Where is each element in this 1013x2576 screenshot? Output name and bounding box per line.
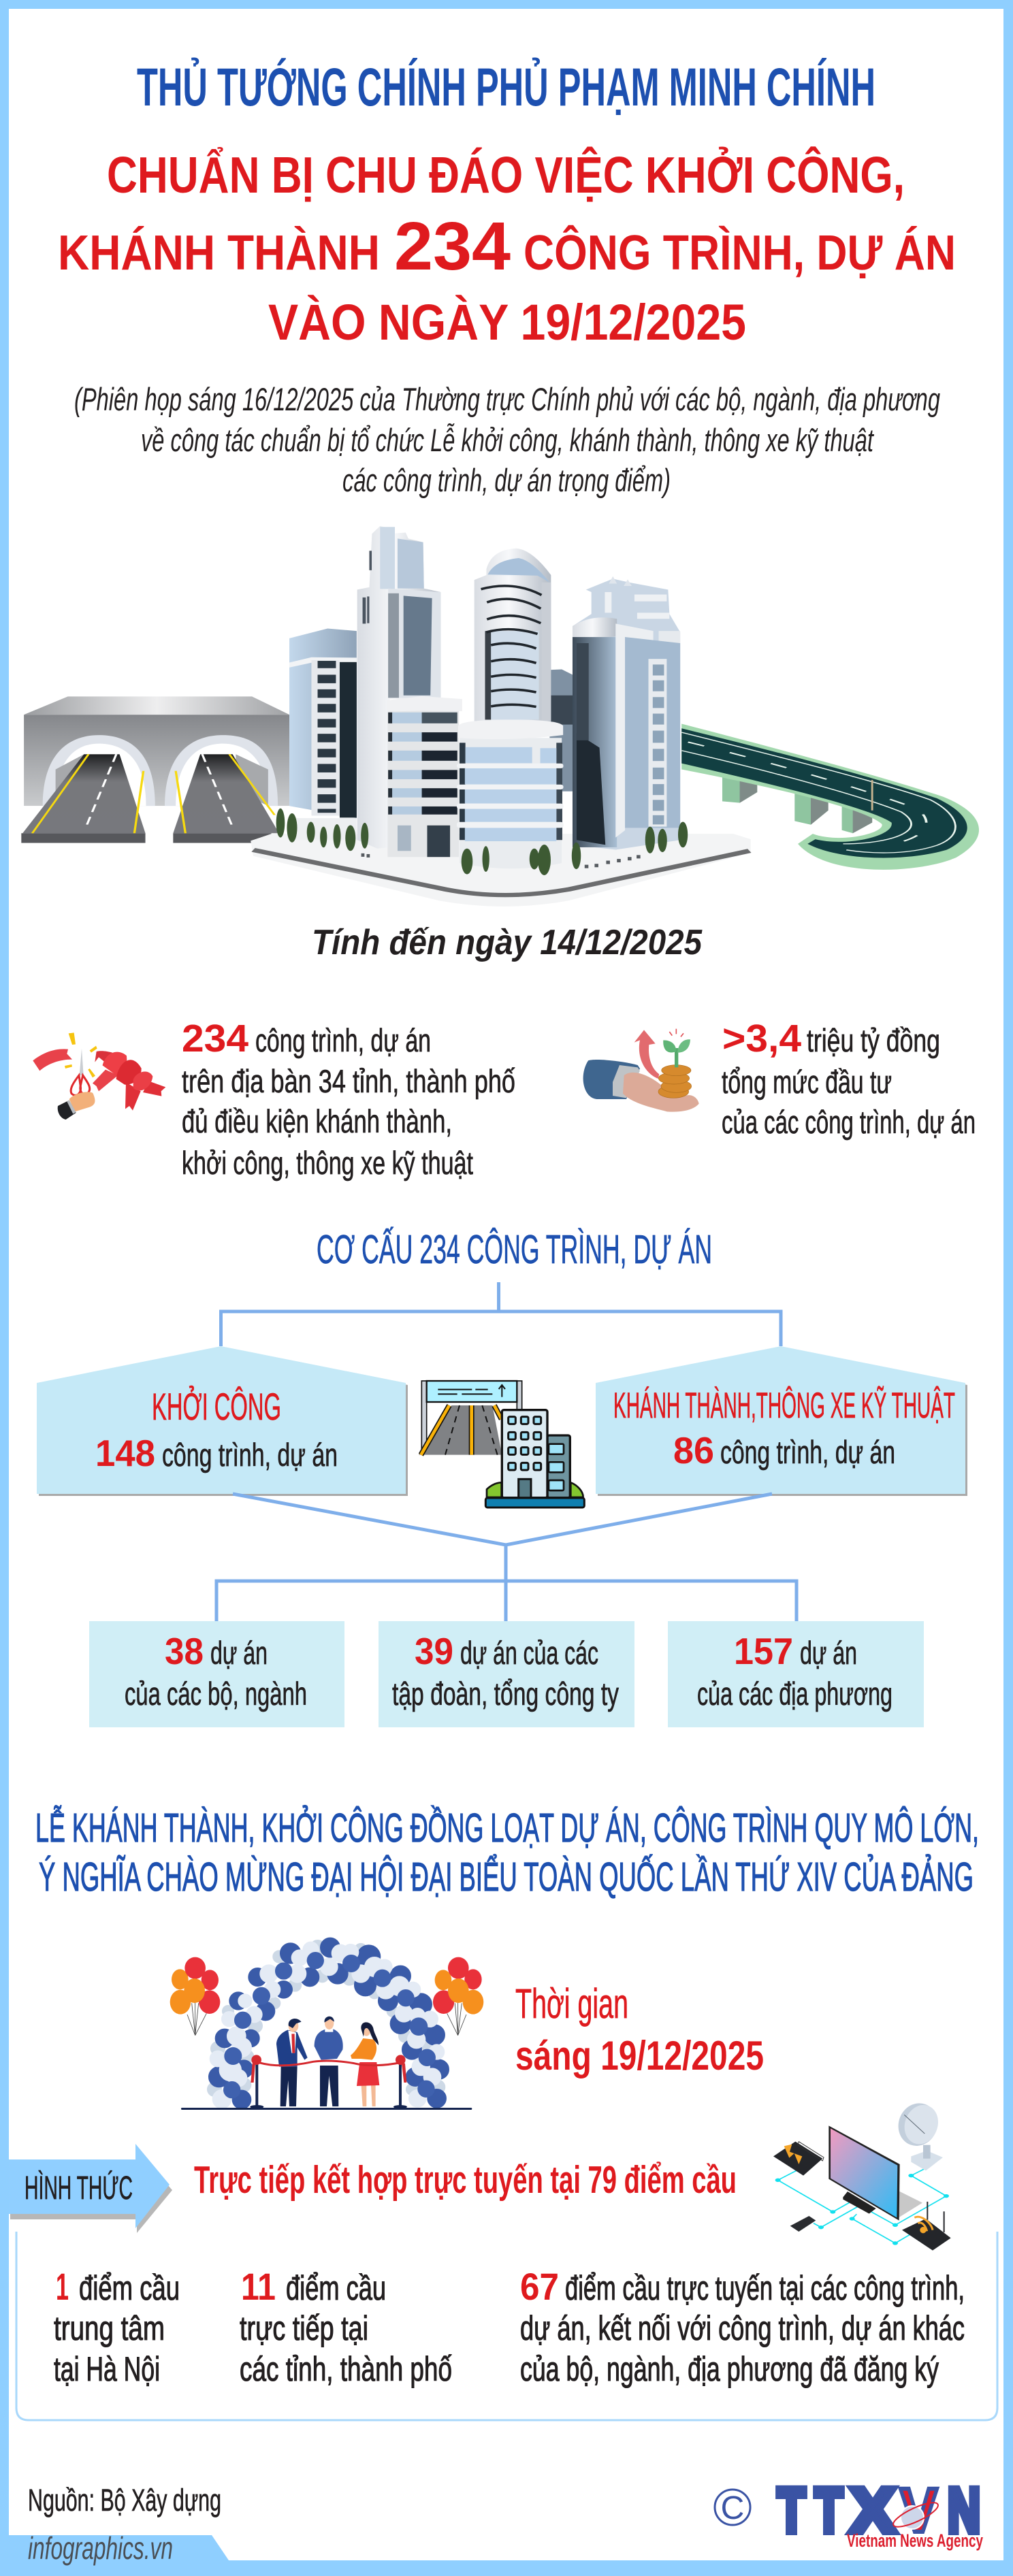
- television: [829, 2125, 922, 2221]
- router: [902, 2202, 951, 2251]
- point: 11: trực tiếp tại: [240, 2309, 368, 2347]
- set top box: [773, 2142, 824, 2176]
- tower tall: [357, 526, 440, 849]
- icon: road and building: [419, 1381, 584, 1507]
- trees: [276, 809, 688, 875]
- subtitle note: các công trình, dự án trọng điểm): [342, 462, 671, 498]
- remote control: [790, 2216, 816, 2232]
- tower left: [289, 629, 357, 840]
- card: localities: 157: [734, 1630, 793, 1672]
- panel: khởi công: [37, 1346, 408, 1496]
- building cluster: [276, 526, 688, 875]
- icon: scissors cutting ribbon: [33, 1032, 165, 1120]
- panel: khánh thành, thông xe kỹ thuật: 86: [673, 1429, 714, 1471]
- stat text: khởi công, thông xe kỹ thuật: [182, 1145, 473, 1181]
- logo: TTXVN: N: [948, 2476, 980, 2545]
- card: corporations: dự án của các: [460, 1635, 598, 1671]
- stat text: tổng mức đầu tư: [722, 1064, 892, 1100]
- subtitle note: [74, 381, 940, 498]
- panel: khởi công: 148: [95, 1432, 155, 1474]
- balloon bouquet right: [433, 1957, 483, 2036]
- icon: hand with coins and seedling: [583, 1029, 699, 1112]
- heading: ceremony: [35, 1805, 979, 1900]
- balloon bouquet left: [170, 1957, 220, 2036]
- tower round: [457, 719, 564, 868]
- panel: connection points: [16, 2232, 997, 2420]
- copyright mark: C: [721, 2490, 744, 2526]
- point: 1: 1: [56, 2265, 69, 2308]
- point: 1: [54, 2265, 180, 2388]
- card: ministries: của các bộ, ngành: [125, 1676, 307, 1712]
- logo: TTXVN: [777, 2476, 983, 2551]
- panel: khởi công: KHỞI CÔNG: [152, 1385, 281, 1428]
- footer tab: infographics.vn: [28, 2530, 173, 2566]
- small lawn squares: [361, 853, 641, 868]
- point: 67: 67: [520, 2265, 559, 2308]
- point: 11: 11: [241, 2265, 276, 2308]
- illustration: tunnel, towers, elevated road: [21, 526, 979, 907]
- stat text: 234: [182, 1017, 248, 1060]
- card: localities: dự án: [800, 1635, 857, 1671]
- tower right: [549, 576, 680, 850]
- tower curved top: [475, 549, 551, 722]
- stat text: [722, 1017, 976, 1140]
- source: Nguồn: Bộ Xây dựng: [28, 2483, 221, 2517]
- card: corporations: 39: [415, 1630, 453, 1672]
- ribbon and stands: [250, 2055, 407, 2108]
- illustration: TV, satellite and connected devices: [773, 2098, 951, 2251]
- card: ministries: [89, 1621, 344, 1727]
- stat text: công trình, dự án: [255, 1022, 431, 1058]
- card: localities: [668, 1621, 924, 1727]
- point: 11: [240, 2265, 452, 2388]
- title: red line 2: CÔNG TRÌNH, DỰ ÁN: [524, 225, 956, 280]
- balloon arch: [208, 1938, 448, 2108]
- stat text: đủ điều kiện khánh thành,: [182, 1103, 452, 1139]
- stat: 234 projects: [33, 1017, 515, 1181]
- card: corporations: [379, 1621, 634, 1727]
- point: 11: các tỉnh, thành phố: [240, 2350, 452, 2388]
- satellite dish: [893, 2098, 944, 2170]
- time text: Thời gian: [515, 1980, 628, 2027]
- tunnel: [21, 696, 289, 843]
- tower stacked: [387, 696, 462, 857]
- panel: khánh thành, thông xe kỹ thuật: [596, 1346, 967, 1496]
- arrow: hình thức: HÌNH THỨC: [25, 2170, 133, 2206]
- point: 1: trung tâm: [54, 2309, 165, 2347]
- panel: khởi công: công trình, dự án: [162, 1437, 338, 1473]
- connector: lower tree: [216, 1494, 797, 1621]
- figure: woman: [351, 2022, 379, 2106]
- title: red line 2: [58, 208, 956, 284]
- title block: [58, 56, 956, 350]
- logo: TTXVN: V: [900, 2476, 937, 2545]
- copyright mark: [715, 2490, 750, 2526]
- base platform: [251, 834, 751, 907]
- stat text: >3,4: [722, 1017, 801, 1060]
- format line: Trực tiếp kết hợp trực tuyến tại 79 điểm cầu: [194, 2158, 737, 2202]
- point: 11: điểm cầu: [286, 2269, 386, 2307]
- ground line: [181, 2108, 472, 2110]
- point: 67: [520, 2265, 965, 2388]
- figure: man in suit: [276, 2019, 308, 2106]
- elevated road: [681, 724, 979, 870]
- logo: TTXVN: X: [850, 2476, 895, 2545]
- figure: man in sweater: [315, 2017, 343, 2106]
- date label: Tính đến ngày 14/12/2025: [312, 923, 703, 962]
- title: red line 2: KHÁNH THÀNH: [58, 226, 380, 280]
- point: 1: điểm cầu: [79, 2269, 180, 2307]
- time text: sáng 19/12/2025: [515, 2033, 764, 2078]
- connector: upper tree: [221, 1282, 781, 1346]
- card: corporations: tập đoàn, tổng công ty: [392, 1676, 619, 1712]
- stat text: triệu tỷ đồng: [807, 1022, 940, 1058]
- stat text: [182, 1017, 515, 1181]
- title: red line 2: 234: [394, 208, 511, 284]
- card: ministries: dự án: [210, 1635, 268, 1671]
- time text: [515, 1980, 764, 2078]
- logo: TTXVN: T: [777, 2476, 805, 2545]
- card: localities: của các địa phương: [697, 1676, 893, 1712]
- point: 1: tại Hà Nội: [54, 2350, 160, 2388]
- network lines: [778, 2169, 946, 2243]
- logo: TTXVN: T: [815, 2476, 843, 2545]
- panel: khánh thành, thông xe kỹ thuật: công trình, dự án: [720, 1434, 895, 1470]
- stat: investment: [583, 1017, 976, 1140]
- card: ministries: 38: [165, 1630, 204, 1672]
- heading: structure: CƠ CẤU 234 CÔNG TRÌNH, DỰ ÁN: [317, 1227, 712, 1272]
- stat text: trên địa bàn 34 tỉnh, thành phố: [182, 1063, 515, 1099]
- arrow: hình thức: [9, 2144, 172, 2233]
- title: red line 3: VÀO NGÀY 19/12/2025: [268, 294, 746, 350]
- illustration: ribbon cutting under balloon arch: [170, 1938, 483, 2110]
